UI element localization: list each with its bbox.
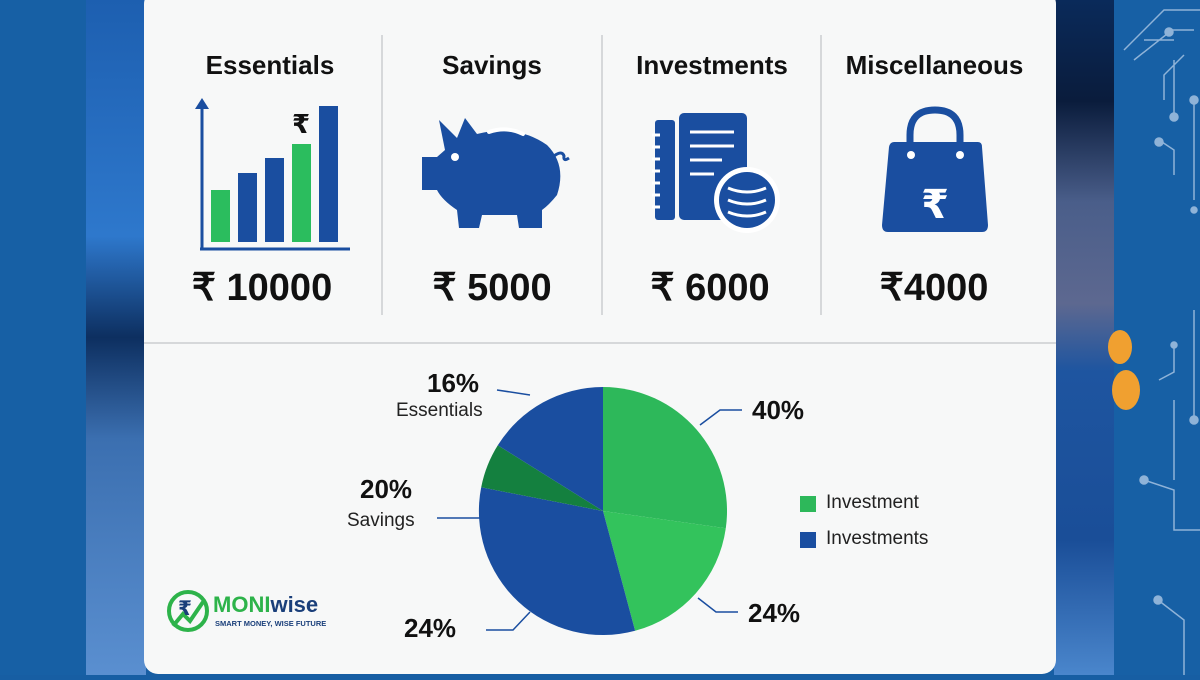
dividers xyxy=(381,35,383,315)
legend: Investments xyxy=(826,528,928,549)
text: Savings xyxy=(347,510,415,531)
heading: Savings: Savings xyxy=(442,50,542,80)
value: ₹ 5000 xyxy=(432,267,552,309)
icon: bar chart xyxy=(195,98,350,250)
panel: savings xyxy=(422,50,570,309)
panel: miscellaneous xyxy=(846,50,1023,309)
text: Essentials xyxy=(396,400,483,421)
right photo strip xyxy=(1054,0,1116,675)
panel: essentials xyxy=(192,50,350,309)
logo: SMART MONEY, WISE FUTURE xyxy=(215,619,326,628)
coins xyxy=(1108,330,1132,364)
panel: investments xyxy=(636,50,788,309)
text: 24% xyxy=(748,598,800,628)
main white card xyxy=(144,0,1056,674)
value: ₹ 6000 xyxy=(650,267,770,309)
text: 40% xyxy=(752,395,804,425)
left background panel xyxy=(0,0,86,675)
logo xyxy=(167,590,326,632)
heading: Miscellaneous: Miscellaneous xyxy=(846,50,1023,80)
value: ₹ 10000 xyxy=(192,267,332,309)
heading: Essentials: Essentials xyxy=(206,50,334,80)
logo: ₹ xyxy=(178,596,192,620)
legend: Investment xyxy=(826,492,919,513)
legend xyxy=(800,492,928,549)
text: 20% xyxy=(360,474,412,504)
icon: shopping bag: ₹ xyxy=(921,182,949,228)
text: 24% xyxy=(404,613,456,643)
left photo strip xyxy=(86,0,146,675)
icon: ledger and coins xyxy=(655,113,775,228)
value: ₹4000 xyxy=(880,267,988,309)
icon: shopping bag xyxy=(882,106,988,232)
pie labels: 16% xyxy=(427,368,479,398)
right background panel with circuit pattern xyxy=(1114,0,1200,675)
logo: MONIwise xyxy=(213,592,318,617)
heading: Investments: Investments xyxy=(636,50,788,80)
icon: bar chart: ₹ xyxy=(292,110,310,140)
icon: piggy bank xyxy=(422,118,570,228)
